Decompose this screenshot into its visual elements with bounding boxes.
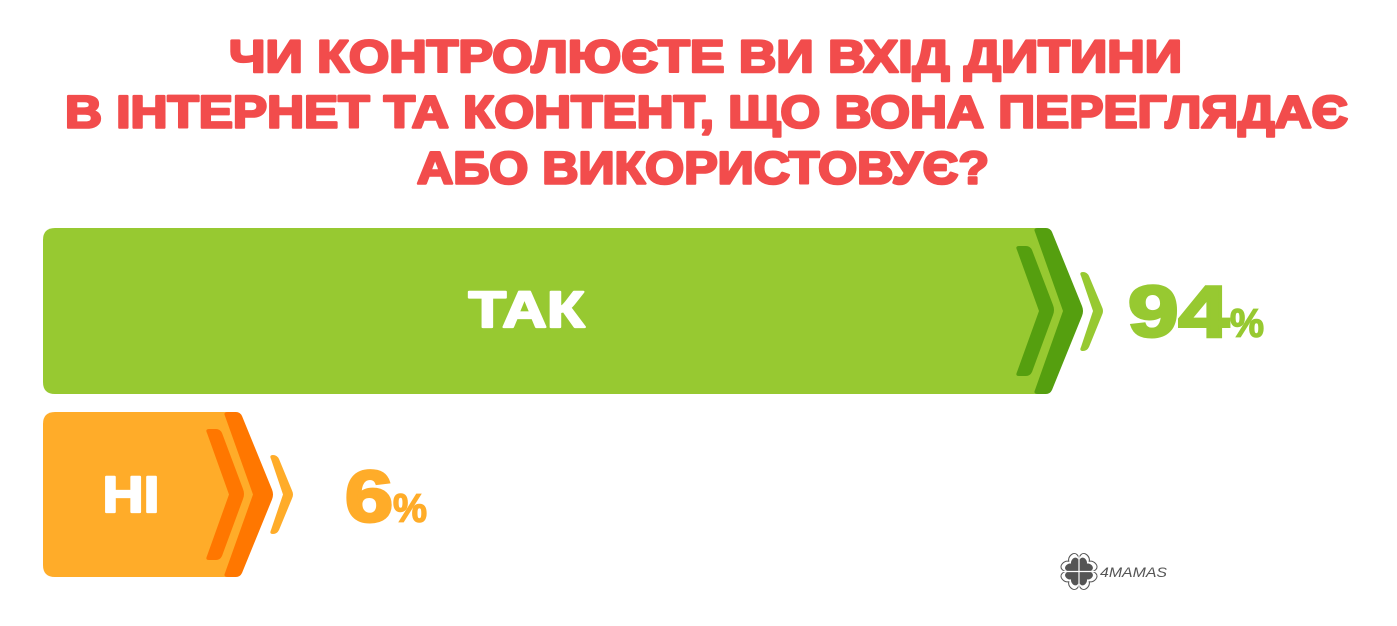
inner dark chevron: [206, 429, 244, 560]
logo: 4MAMAS: [1059, 552, 1168, 591]
value 6%: %: [393, 486, 427, 530]
value 6%: [345, 458, 427, 538]
outer dark chevron: [1034, 228, 1083, 394]
orange bar body: [43, 412, 273, 577]
value 6%: 6: [345, 458, 393, 538]
bar: НІ 6%: [43, 412, 427, 577]
bar: ТАК 94%: [43, 228, 1264, 394]
value 94%: %: [1230, 302, 1264, 346]
small outer chevron: [270, 455, 293, 534]
outer dark chevron: [224, 412, 273, 577]
label ТАК: ТАК: [468, 281, 586, 338]
value 94%: 94: [1128, 272, 1229, 352]
logo text: 4MAMAS: [1100, 564, 1168, 580]
title: ЧИ КОНТРОЛЮЄТЕ ВИ ВХІД ДИТИНИ: [229, 31, 1182, 82]
green bar body: [43, 228, 1083, 394]
inner dark chevron: [1016, 246, 1054, 376]
title: [65, 31, 1348, 193]
title: АБО ВИКОРИСТОВУЄ?: [417, 142, 989, 193]
small outer chevron: [1080, 272, 1103, 351]
value 94%: [1128, 272, 1264, 352]
label НІ: НІ: [102, 466, 160, 523]
title: В ІНТЕРНЕТ ТА КОНТЕНТ, ЩО ВОНА ПЕРЕГЛЯДАЄ: [65, 86, 1348, 137]
icon: clover: [1059, 552, 1099, 591]
